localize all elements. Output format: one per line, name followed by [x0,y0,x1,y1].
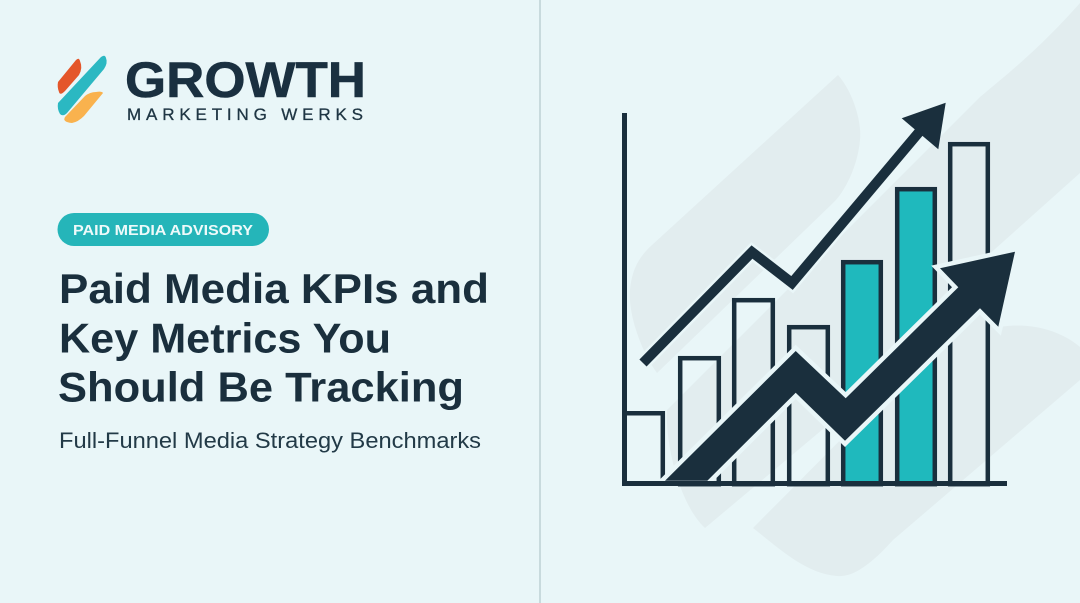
logo wordmark: GROWTH [125,52,366,108]
title [58,265,489,411]
bar chart [624,103,1015,484]
thin trend arrow [643,103,946,363]
thick trend arrow [665,252,1015,481]
subtitle: Full-Funnel Media Strategy Benchmarks [59,428,481,453]
divider [539,0,541,603]
chart axes [624,113,1007,484]
logo [58,52,366,124]
chart bars [627,144,988,484]
title: Should Be Tracking [58,364,464,411]
logo tagline: MARKETING WERKS [127,105,363,124]
badge: paid media advisory [58,213,269,246]
thick arrow halo [665,252,1015,481]
background shapes [630,3,1080,576]
title: Paid Media KPIs and [59,265,489,312]
badge: paid media advisory: PAID MEDIA ADVISORY [73,222,253,239]
title: Key Metrics You [59,315,391,362]
icon: logo mark [58,56,107,123]
